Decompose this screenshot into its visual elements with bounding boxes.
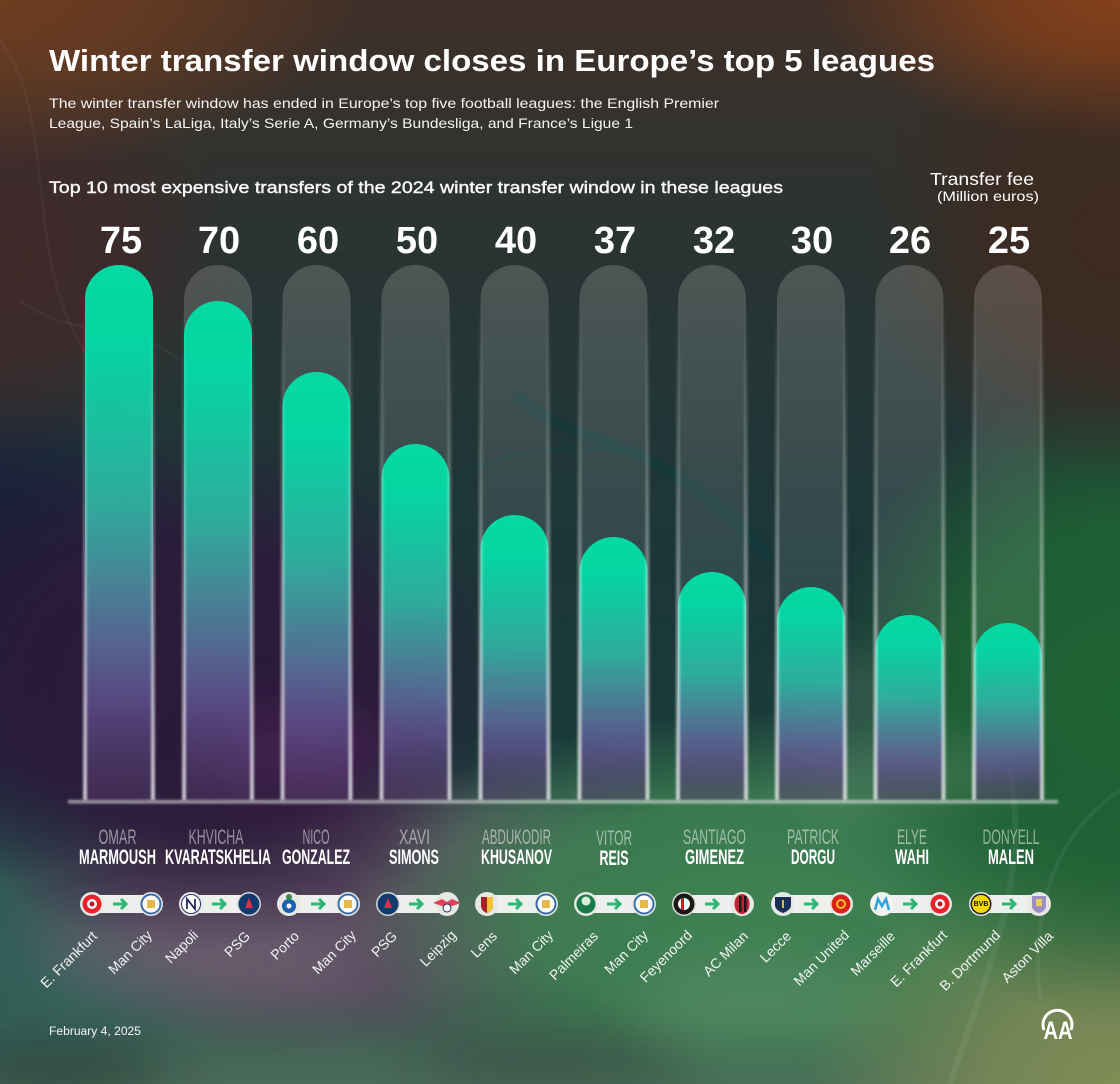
name: Xavi Simons — [389, 826, 439, 869]
bar: Khusanov 40: 40 — [495, 220, 537, 262]
club labels: Palmeiras — [546, 928, 601, 983]
bar: Wahi 26: 26 — [889, 220, 931, 262]
bar chart — [68, 220, 1058, 804]
player names — [79, 826, 1040, 870]
name: Omar Marmoush — [79, 826, 156, 869]
subtitle: The winter transfer window has ended in Europe’s top five football leagues: the English Premier — [49, 95, 719, 111]
date: February 4, 2025 — [49, 1026, 141, 1038]
bar: Reis 37: 37 — [594, 220, 636, 262]
club labels: Lecce — [756, 928, 794, 966]
name: Elye Wahi: WAHI — [895, 846, 929, 869]
bar: Simons 50: 50 — [396, 220, 438, 262]
name: Vitor Reis — [596, 827, 632, 870]
club labels: Aston Villa — [998, 928, 1056, 986]
bar: Dorgu 30 — [775, 220, 847, 800]
name: Patrick Dorgu — [787, 826, 839, 869]
transfer: Lens to Man City — [475, 892, 558, 916]
transfer: Napoli to PSG — [179, 892, 261, 916]
background smoke — [0, 656, 1010, 1084]
club labels: E. Frankfurt — [887, 927, 950, 990]
bar: Gimenez 32: 32 — [693, 220, 735, 262]
club labels: PSG — [221, 928, 253, 960]
transfer: Marseille to Frankfurt — [870, 892, 952, 916]
name: Khvicha Kvaratskhelia — [165, 826, 271, 869]
name: Khvicha Kvaratskhelia: KVARATSKHELIA — [165, 846, 271, 869]
name: Abdukodir Khusanov — [481, 826, 552, 869]
club labels: Man United — [790, 927, 852, 989]
bar: Gonzalez 60 — [280, 220, 352, 800]
club labels — [37, 927, 1056, 994]
name: Vitor Reis: REIS — [600, 847, 628, 870]
bar: Kvaratskhelia 70 — [182, 220, 254, 800]
name: Omar Marmoush: OMAR — [98, 826, 136, 849]
club labels: Leipzig — [416, 927, 459, 969]
transfer: Frankfurt to Man City — [80, 892, 163, 916]
club labels: AC Milan — [700, 928, 751, 979]
name: Santiago Gimenez: GIMENEZ — [685, 846, 744, 869]
transfer pills — [80, 892, 1051, 916]
club labels: B. Dortmund — [936, 927, 1003, 994]
name: Khvicha Kvaratskhelia: KHVICHA — [188, 826, 244, 849]
bar: Marmoush 75 — [83, 220, 155, 800]
bar: Gimenez 32 — [676, 220, 748, 800]
transfer: Palmeiras to Man City — [574, 892, 656, 916]
subtitle: League, Spain’s LaLiga, Italy’s Serie A, Germany’s Bundesliga, and France’s Ligue 1 — [49, 115, 633, 131]
name: Patrick Dorgu: PATRICK — [787, 826, 839, 849]
bar: Khusanov 40 — [478, 220, 550, 800]
name: Elye Wahi: ELYE — [897, 826, 927, 849]
legend: transfer fee unit — [930, 169, 1039, 204]
subtitle — [49, 95, 719, 131]
transfer: Porto to Man City — [277, 892, 360, 916]
legend: transfer fee unit: (Million euros) — [937, 188, 1039, 204]
name: Santiago Gimenez: SANTIAGO — [683, 826, 746, 849]
name: Xavi Simons: SIMONS — [389, 846, 439, 869]
club labels: Porto — [267, 928, 302, 963]
name: Xavi Simons: XAVI — [399, 826, 430, 849]
transfer: Dortmund to Aston Villa: BVB — [974, 901, 988, 908]
chart baseline — [68, 800, 1058, 804]
bar: Gonzalez 60: 60 — [297, 220, 339, 262]
transfer: Lecce to Man United — [771, 892, 853, 916]
name: Donyell Malen: MALEN — [988, 846, 1034, 869]
club labels: E. Frankfurt — [37, 928, 100, 991]
name: Abdukodir Khusanov: ABDUKODIR — [482, 826, 551, 849]
club labels: Napoli — [162, 927, 201, 966]
club labels: Man City — [601, 927, 651, 977]
name: Donyell Malen: DONYELL — [982, 826, 1040, 849]
bar: Kvaratskhelia 70: 70 — [198, 220, 240, 262]
logo: AA — [1043, 1010, 1072, 1045]
legend: transfer fee unit: Transfer fee — [930, 169, 1034, 189]
club labels: Man City — [309, 927, 359, 977]
bar: Wahi 26 — [874, 220, 946, 800]
name: Nico Gonzalez: NICO — [302, 826, 330, 849]
bar: Marmoush 75: 75 — [100, 220, 142, 262]
club labels: Lens — [467, 928, 500, 961]
name: Vitor Reis: VITOR — [596, 827, 632, 850]
name: Nico Gonzalez — [282, 826, 350, 869]
bar: Malen 25 — [972, 220, 1044, 800]
name: Elye Wahi — [895, 826, 929, 869]
chart heading: Top 10 most expensive transfers of the 2024 winter transfer window in these leagues — [49, 178, 783, 197]
bar: Malen 25: 25 — [988, 220, 1030, 262]
name: Donyell Malen — [982, 826, 1040, 869]
club labels: Marseille — [847, 928, 898, 979]
bar: Simons 50 — [380, 220, 452, 800]
name: Santiago Gimenez — [683, 826, 746, 869]
name: Patrick Dorgu: DORGU — [791, 846, 835, 869]
bar: Reis 37 — [578, 220, 650, 800]
club labels: Man City — [105, 927, 155, 977]
name: Omar Marmoush: MARMOUSH — [79, 846, 156, 869]
logo: AA: AA — [1044, 1017, 1072, 1045]
name: Abdukodir Khusanov: KHUSANOV — [481, 846, 552, 869]
transfer: Feyenoord to AC Milan — [672, 892, 754, 916]
name: Nico Gonzalez: GONZALEZ — [282, 846, 350, 869]
transfer: PSG to Leipzig — [376, 892, 461, 916]
club labels: Man City — [506, 927, 556, 977]
bar: Dorgu 30: 30 — [791, 220, 833, 262]
transfer: Dortmund to Aston Villa — [969, 892, 1051, 916]
club labels: PSG — [368, 928, 400, 960]
title: Winter transfer window closes in Europe’s top 5 leagues — [49, 43, 935, 78]
club labels: Feyenoord — [636, 927, 695, 985]
